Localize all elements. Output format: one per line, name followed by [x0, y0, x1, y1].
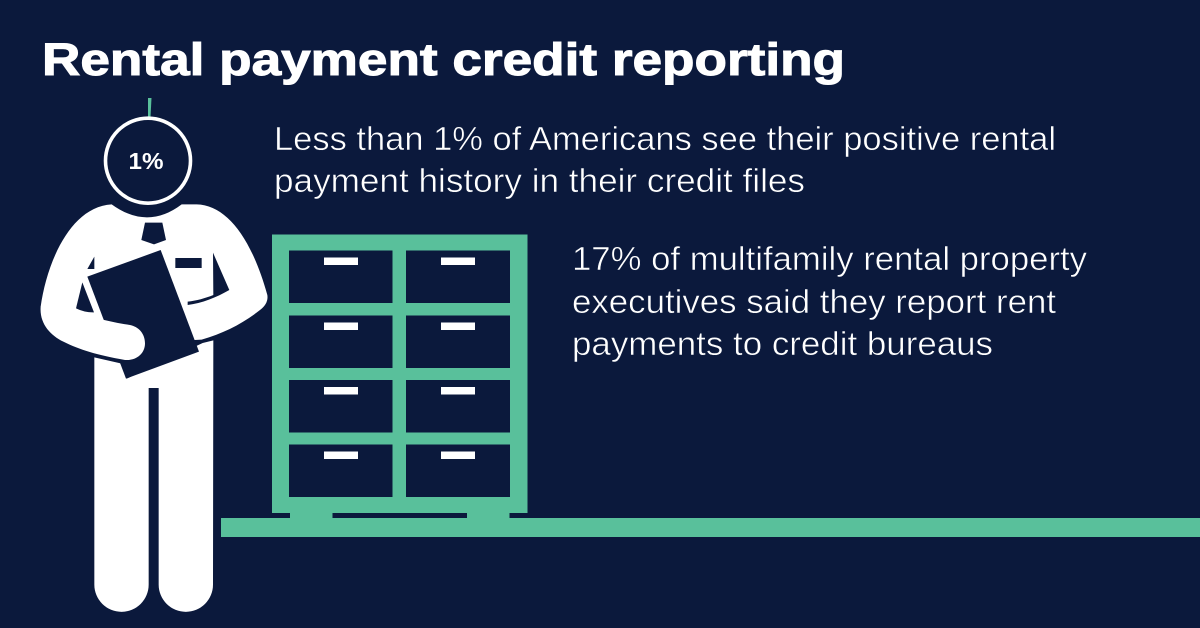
- head circle: [106, 118, 190, 203]
- cabinet feet: [290, 512, 510, 519]
- head antenna: [148, 98, 152, 117]
- text block: positive rental history: payment history in their credit files: [274, 162, 805, 199]
- text block: positive rental history: [274, 120, 1056, 199]
- text block: multifamily executives: 17% of multifamily rental property: [572, 240, 1088, 277]
- text block: multifamily executives: payments to credit bureaus: [572, 325, 993, 362]
- cabinet frame: [272, 234, 528, 513]
- icon: filing cabinet: [272, 234, 528, 519]
- body figure: [41, 204, 268, 612]
- text block: multifamily executives: executives said they report rent: [572, 283, 1056, 320]
- text block: multifamily executives: [572, 240, 1088, 362]
- floor line: [221, 518, 1200, 537]
- drawer handles: [324, 258, 475, 459]
- text block: positive rental history: Less than 1% of Americans see their positive rental: [274, 120, 1056, 157]
- head label: 1%: [128, 148, 164, 174]
- title: Rental payment credit reporting: [42, 34, 845, 85]
- icon: person holding clipboard: [41, 98, 268, 612]
- drawers: [289, 250, 510, 497]
